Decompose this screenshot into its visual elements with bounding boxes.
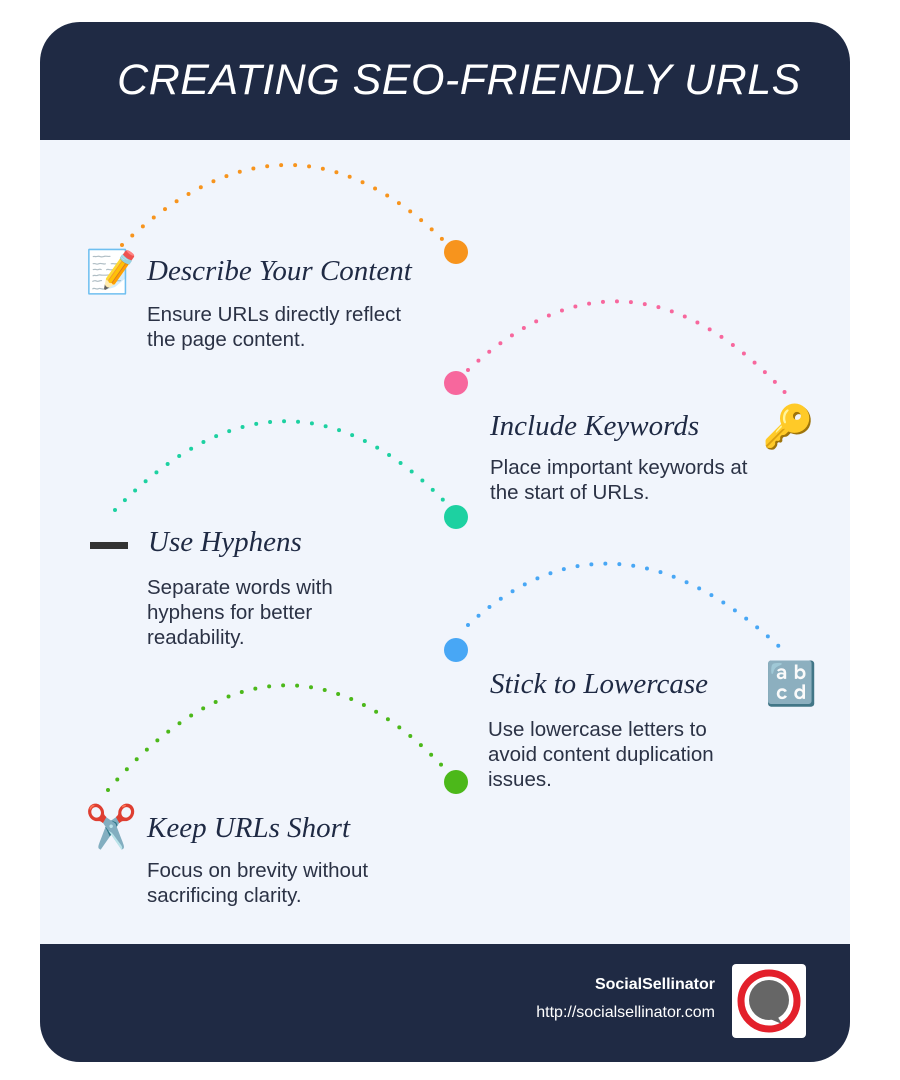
logo [732,964,806,1038]
brand name: SocialSellinator [595,976,715,993]
title: CREATING SEO-FRIENDLY URLS [117,56,801,104]
heading: Describe Your Content [147,255,412,287]
header [40,22,850,140]
icon: minus [90,542,128,549]
text [488,718,714,791]
text: Ensure URLs directly reflect [147,303,401,326]
icon: memo: 📝 [85,248,137,297]
text: Separate words with [147,576,333,599]
text: avoid content duplication [488,743,714,766]
heading: Keep URLs Short [147,812,350,844]
icon: key: 🔑 [762,403,814,452]
heading: Use Hyphens [148,526,302,558]
icon: scissors: ✂️ [85,803,137,852]
text: Use lowercase letters to [488,718,707,741]
text [147,303,401,351]
step 5 [85,803,368,907]
text: the page content. [147,328,305,351]
text: issues. [488,768,552,791]
text [147,576,333,649]
step 2 [490,403,814,504]
footer [40,944,850,1062]
icon: abcd: 🔡 [765,660,817,709]
step 1 [85,248,412,351]
text: hyphens for better [147,601,312,624]
text [490,456,748,504]
heading: Stick to Lowercase [490,668,708,700]
brand url: http://socialsellinator.com [536,1004,715,1021]
heading: Include Keywords [490,410,699,442]
text: sacrificing clarity. [147,884,302,907]
step 4 [488,660,817,791]
text [147,859,368,907]
text: the start of URLs. [490,481,650,504]
text: Place important keywords at [490,456,748,479]
step 3 [90,526,333,649]
text: Focus on brevity without [147,859,368,882]
text: readability. [147,626,245,649]
